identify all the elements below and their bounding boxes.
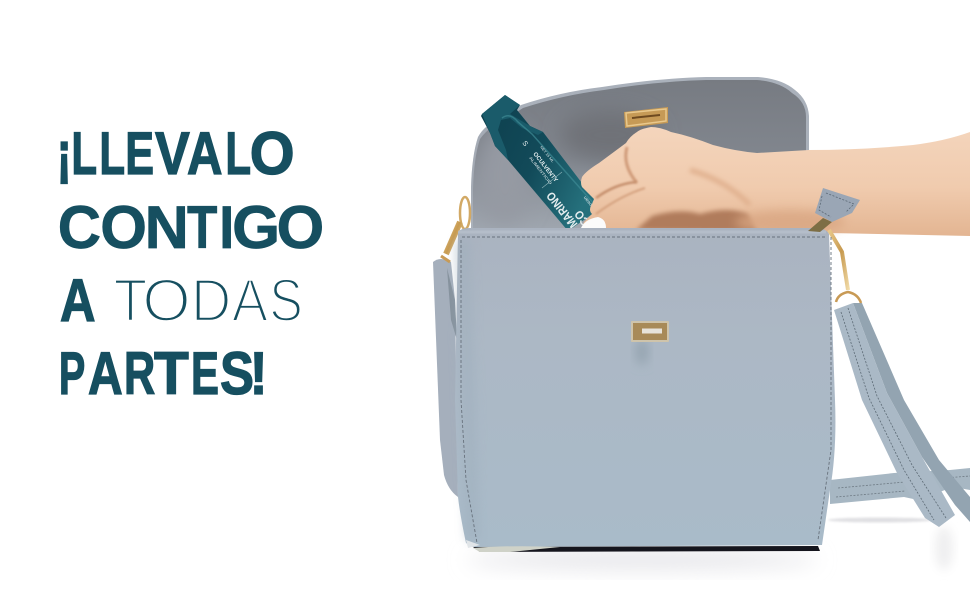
sachet label: CO	[571, 208, 592, 229]
sachet label: ocean	[582, 195, 595, 209]
hand and arm	[581, 127, 970, 236]
left side shading	[455, 240, 480, 540]
title line: ¡LLEVALO: A	[187, 120, 222, 187]
title line: CONTIGO: G	[232, 194, 280, 261]
horizontal strap	[830, 468, 970, 504]
title line: CONTIGO: I	[219, 194, 234, 261]
sachet label: NET 15 ML	[539, 145, 555, 163]
stitching	[461, 237, 831, 543]
right strap back	[830, 303, 970, 527]
top rim	[458, 230, 826, 234]
front lock	[631, 321, 669, 365]
title line: CONTIGO: O	[100, 194, 147, 261]
title	[57, 120, 324, 407]
palm shadow	[636, 210, 758, 232]
title line: A TODAS: O	[142, 267, 191, 334]
left gold clip	[441, 197, 470, 262]
sachet label: S	[520, 140, 529, 148]
title line: ¡LLEVALO: V	[155, 120, 190, 187]
title line: CONTIGO: O	[277, 194, 324, 261]
title line: CONTIGO: C	[58, 194, 101, 261]
finger creases	[626, 147, 637, 183]
title line: ¡LLEVALO: O	[250, 120, 294, 187]
title line: A TODAS	[60, 267, 303, 334]
title line: PARTES!: A	[88, 340, 123, 407]
arm and hand silhouette	[581, 127, 970, 236]
bag bottom edge	[473, 546, 820, 552]
back strap section	[853, 303, 970, 522]
wrist shading	[735, 210, 845, 234]
title line: A TODAS: S	[269, 267, 303, 334]
title line: PARTES!: P	[59, 340, 85, 407]
corner highlights	[466, 540, 480, 548]
title line: ¡LLEVALO: L	[71, 120, 97, 187]
title line: A TODAS: A	[60, 267, 96, 334]
sachet label: ALIMENTICIO	[528, 156, 553, 185]
floor shadow	[466, 518, 953, 570]
title line: ¡LLEVALO: L	[225, 120, 251, 187]
title line: A TODAS: T	[114, 267, 147, 334]
title line: ¡LLEVALO: E	[125, 120, 154, 187]
title line: PARTES!: R	[124, 340, 155, 407]
title line: PARTES!: S	[220, 340, 254, 407]
title line: PARTES!: T	[154, 340, 189, 407]
bag front panel	[455, 228, 835, 552]
right gold clip	[829, 230, 861, 303]
sachet label: OCULVENTY	[531, 152, 558, 184]
title line: CONTIGO: N	[145, 194, 189, 261]
knuckle shading	[690, 170, 750, 205]
thumb nail	[581, 217, 606, 228]
title line: PARTES!: !	[250, 340, 268, 407]
left strap	[433, 259, 458, 497]
product sachet	[481, 95, 601, 231]
sachet body	[481, 95, 601, 231]
sachet label: MARINO	[543, 189, 580, 231]
title line: ¡LLEVALO: L	[99, 120, 125, 187]
bag open flap	[471, 77, 809, 232]
title line: CONTIGO: T	[187, 194, 217, 261]
title line: A TODAS: A	[232, 267, 268, 334]
title line: PARTES!: E	[191, 340, 219, 407]
flap clasp	[624, 107, 668, 128]
sachet label	[520, 140, 595, 231]
title line: A TODAS: D	[191, 267, 231, 334]
handbag photo illustration	[433, 77, 970, 570]
front strap section	[834, 303, 955, 527]
strap tab over arm	[808, 188, 860, 232]
title line: ¡LLEVALO: ¡	[57, 120, 72, 187]
